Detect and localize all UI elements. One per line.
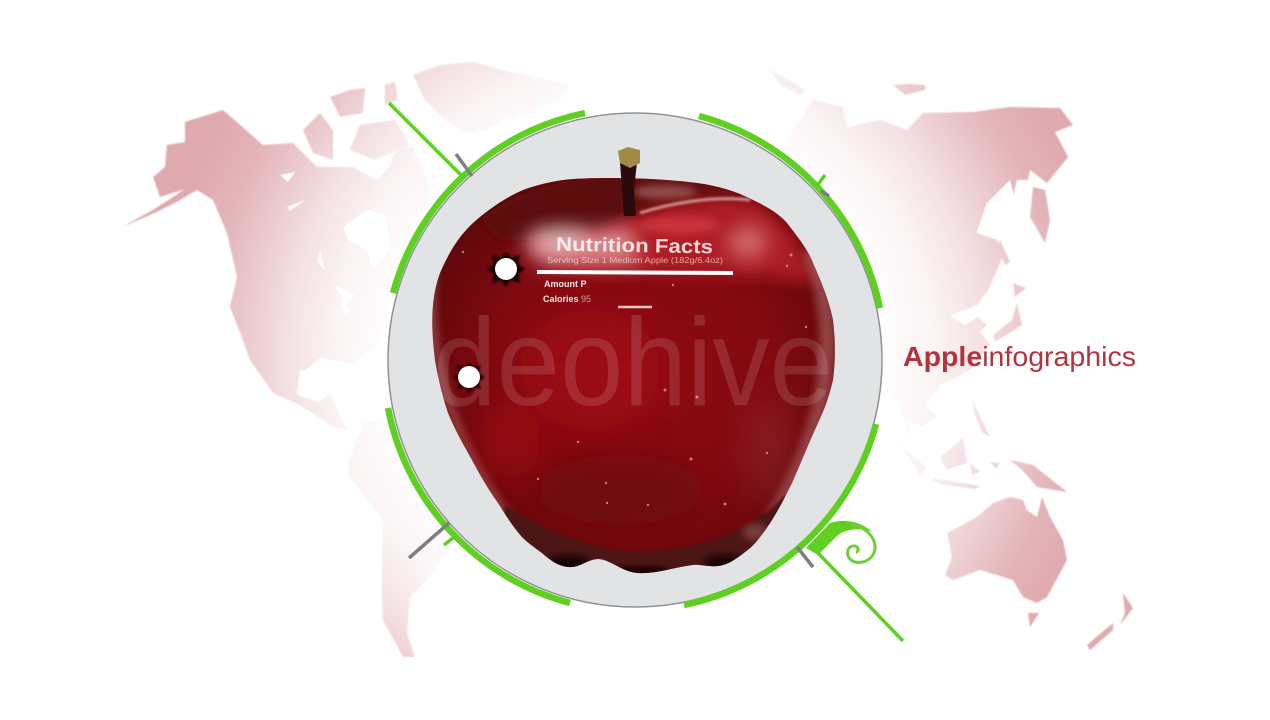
grey disc	[388, 113, 882, 607]
continent: South America	[348, 420, 450, 657]
short rule	[618, 306, 652, 308]
green ring segments	[388, 113, 880, 605]
island: Kamchatka	[1030, 187, 1050, 243]
label heading: Nutrition Facts	[556, 234, 713, 258]
lakes and bays	[280, 172, 1015, 400]
islands: Japan	[993, 240, 1026, 342]
green pointer lines	[389, 103, 903, 641]
label rule	[537, 272, 733, 273]
continent: Eurasia	[760, 70, 1073, 440]
title: Appleinfographics	[903, 341, 1136, 372]
apple shading	[432, 177, 827, 580]
continent: Australia	[945, 497, 1067, 603]
serving size text: Serving Size 1 Medium Apple (182g/6.4oz)	[547, 255, 723, 265]
amount text: Amount P	[544, 279, 586, 289]
grey tick marks	[409, 154, 829, 567]
island: Tasmania	[1028, 613, 1039, 627]
infographic canvas	[124, 62, 1135, 658]
icon: green swirl ornament	[806, 521, 875, 563]
islands: South East Asia	[898, 400, 1000, 489]
apple stem	[620, 162, 637, 216]
continent: Arctic islands	[303, 82, 410, 160]
front lobe	[528, 198, 815, 285]
continent: North America	[122, 110, 433, 430]
back rim of the apple	[480, 177, 745, 240]
marker: upper bullet	[487, 252, 525, 287]
bottom band	[504, 495, 786, 574]
island: New Guinea	[1010, 460, 1067, 492]
marker: lower bullet	[453, 362, 485, 394]
continent: Greenland	[413, 62, 570, 135]
apple stem cap	[618, 147, 640, 168]
watermark: deohive	[433, 294, 833, 432]
nutrition label	[537, 234, 733, 307]
islands: New Zealand	[1087, 593, 1133, 650]
apple body	[432, 178, 835, 573]
side and lower tones	[432, 273, 512, 514]
apple	[432, 147, 835, 580]
apple speckles	[462, 251, 807, 506]
calories text: Calories 95	[543, 294, 591, 304]
